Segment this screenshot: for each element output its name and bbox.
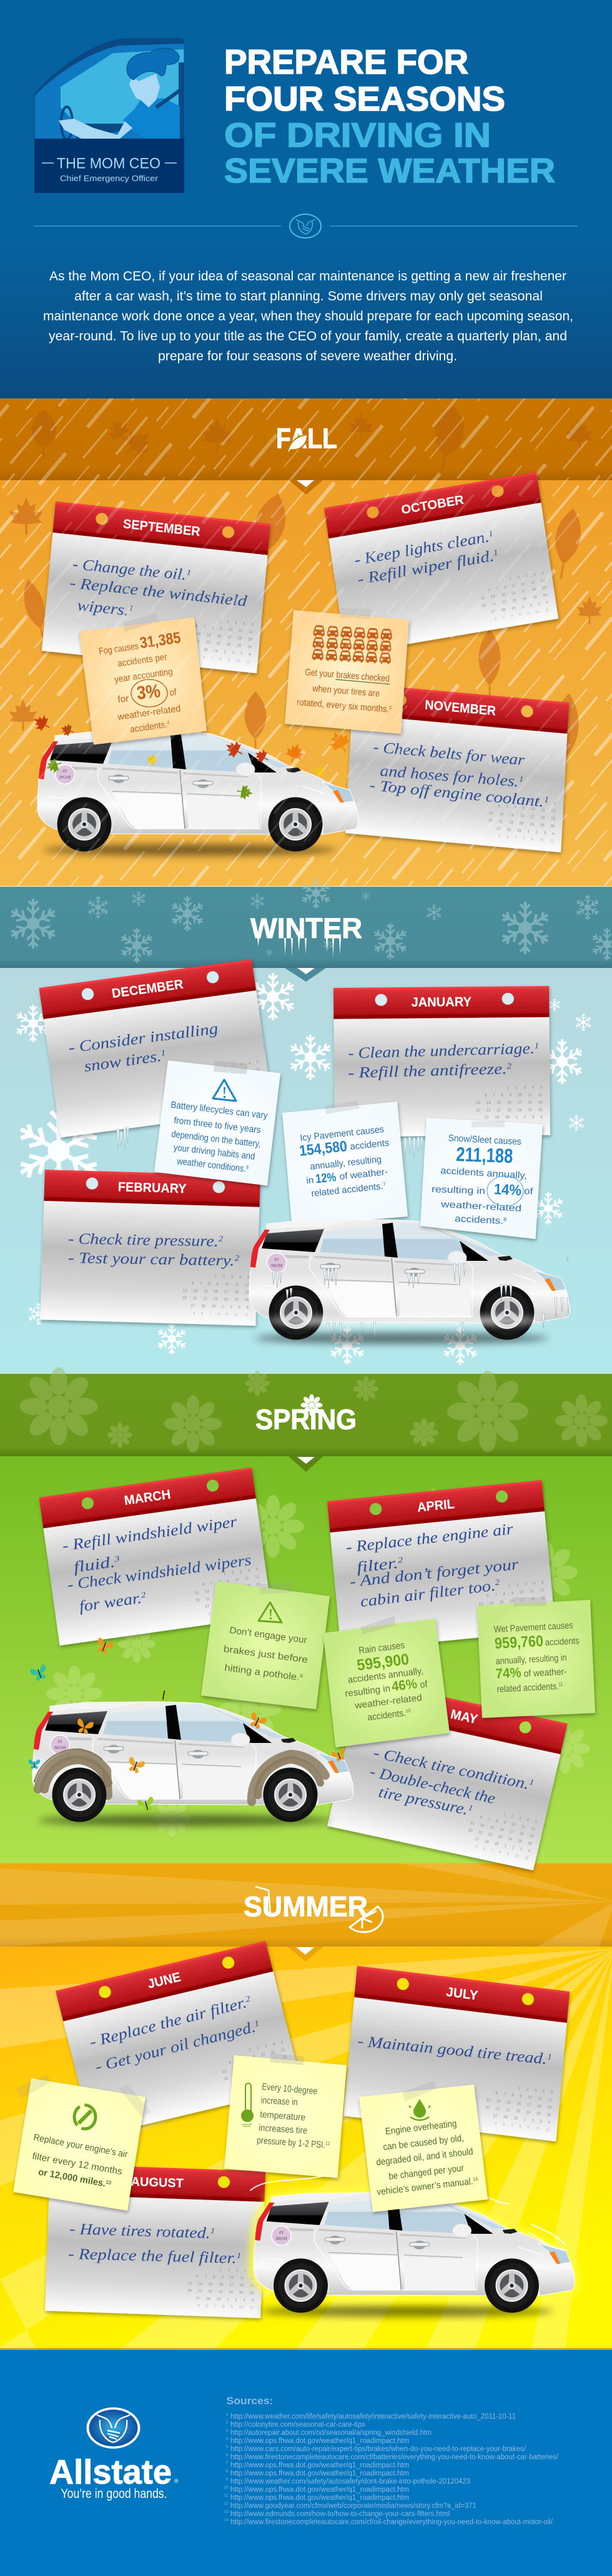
October tasks: 1 <box>493 548 499 558</box>
intro paragraph: As the Mom CEO, if your idea of seasonal car maintenance is getting a new air freshener <box>49 269 566 284</box>
sources: 10 <box>224 2486 229 2490</box>
May tasks: 1 <box>468 1802 474 1813</box>
March tasks: - Refill windshield wiper <box>61 1514 238 1555</box>
calendar: August: AUGUST <box>131 2174 184 2191</box>
panel: fall <box>0 398 612 886</box>
panel: summer <box>0 1863 612 2351</box>
December tasks: - Consider installing <box>67 1020 219 1057</box>
sticky note: battery: your driving habits and <box>173 1142 255 1162</box>
icon: warning triangle <box>259 1602 282 1622</box>
sources: http://www.cars.com/auto-repair/expert-tips/brakes/when-do-you-need-to-replace-your-brakes/ <box>230 2445 526 2453</box>
sticky note: snow and sleet: accidents. <box>455 1213 497 1226</box>
June tasks: 2 <box>244 1993 252 2004</box>
sources: http://www.ops.fhwa.dot.gov/weather/q1_roadimpact.htm <box>230 2470 409 2477</box>
icon: oil drop <box>409 2099 430 2120</box>
heat lines <box>250 2175 568 2250</box>
May tasks: - Check tire condition. <box>372 1744 513 1789</box>
sticky note: temperature <box>224 2053 347 2178</box>
calendar: October: OCTOBER <box>400 493 465 517</box>
heading: summer: SUMMER <box>244 1891 368 1922</box>
sticky note: brakes: 5 <box>389 705 392 711</box>
calendar: July <box>343 1966 570 2141</box>
icon: warning triangle <box>213 1080 236 1101</box>
sticky note: air filter: filter every 12 months <box>31 2151 123 2177</box>
sources: http://www.ops.fhwa.dot.gov/weather/q1_roadimpact.htm <box>230 2486 409 2494</box>
intro paragraph <box>43 269 573 363</box>
sticky note: brakes: when your tires are <box>312 683 380 699</box>
sticky note: brakes: rotated, every six months. <box>297 697 404 716</box>
sticky note: engine overheating: 14 <box>473 2176 478 2182</box>
January tasks: 2 <box>506 1061 512 1070</box>
sticky note: battery: Battery lifecycles can vary <box>170 1100 269 1121</box>
sticky note: wet pavement: 959,760 <box>494 1632 544 1652</box>
sticky note: snow and sleet: weather-related <box>440 1199 522 1214</box>
August tasks: - Have tires rotated. <box>69 2221 195 2241</box>
logo card: The Mom CEO <box>34 38 184 193</box>
logo: Allstate: You’re in good hands. <box>61 2487 167 2501</box>
sticky note: brakes: Get your brakes checked <box>305 667 390 684</box>
mud splatter <box>34 1749 325 1802</box>
intro paragraph: year-round. To live up to your title as the CEO of your family, create a quarterly plan, and <box>49 329 567 343</box>
March tasks: 2 <box>141 1590 147 1600</box>
calendar: June <box>56 1941 302 2137</box>
summer band <box>0 1863 612 1947</box>
logo: Allstate <box>49 2407 179 2501</box>
sticky note: snow and sleet: 14% <box>493 1181 522 1199</box>
July tasks: - Maintain good tire tread. <box>357 2033 525 2066</box>
title: OF DRIVING IN <box>224 116 491 154</box>
sticky note: icy pavement: 154,580 <box>299 1138 348 1160</box>
sources: http://www.firestonecompleteautocare.com/cf/oil-change/everything-you-need-to-know-about-motor-oil/ <box>230 2519 553 2526</box>
summer background <box>0 1947 612 2350</box>
frost and icicles <box>264 1257 570 1336</box>
February tasks: - Check tire pressure. <box>68 1231 202 1250</box>
fall background <box>0 480 612 886</box>
calendar: November <box>345 683 569 852</box>
sticky note: snow and sleet: 8 <box>503 1216 507 1222</box>
sticky note: air filter <box>13 2075 151 2211</box>
logo: Allstate: ® <box>174 2478 179 2484</box>
fall band <box>0 398 612 480</box>
September tasks <box>69 556 248 619</box>
December tasks: snow tires. <box>83 1049 152 1075</box>
sources: http://www.goodyear.com/cfmx/web/corporate/media/news/story.cfm?a_id=371 <box>230 2502 476 2510</box>
calendar: September: SEPTEMBER <box>122 517 201 539</box>
calendar: February <box>40 1170 260 1326</box>
sticky note: battery <box>154 1060 280 1185</box>
sticky note: battery: from three to five years <box>174 1115 262 1135</box>
sticky note: snow and sleet: resulting in <box>432 1184 485 1197</box>
May tasks: - Double-check the <box>368 1763 497 1807</box>
sticky note: engine overheating: degraded oil, and it should <box>376 2146 473 2168</box>
car: winter <box>249 1220 570 1344</box>
September tasks: - Replace the windshield <box>69 575 248 610</box>
sticky note: wet pavement: 11 <box>558 1681 563 1687</box>
sticky note: fog: weather-related <box>116 703 182 723</box>
sticky note: wet pavement: 74% <box>495 1664 521 1681</box>
sticky note: air filter: or 12,000 miles. <box>37 2167 108 2189</box>
sticky note: icy pavement: accidents <box>350 1137 390 1152</box>
calendar: January: JANUARY <box>411 995 471 1010</box>
sticky note: snow and sleet <box>420 1118 543 1239</box>
icon: wrench and arrows <box>74 2105 96 2129</box>
sticky note: wet pavement <box>477 1597 595 1718</box>
sticky note: air filter: Replace your engine’s air <box>32 2132 129 2160</box>
calendar: November: NOVEMBER <box>425 698 496 719</box>
sticky note: wet pavement: of weather- <box>523 1666 567 1679</box>
sources <box>224 2395 559 2526</box>
winter background <box>0 968 612 1373</box>
August tasks: 1 <box>237 2251 241 2260</box>
October tasks: - Refill wiper fluid. <box>356 551 476 588</box>
February tasks: 2 <box>234 1253 240 1263</box>
calendar: July: JULY <box>445 1985 478 2003</box>
sources: http://www.weather.com/safety/autosafety/dont-brake-into-pothole-20120423 <box>230 2478 470 2485</box>
calendar: February: FEBRUARY <box>118 1180 187 1196</box>
sticky note: icy pavement: 7 <box>383 1181 387 1187</box>
sticky note: fog: accidents. <box>129 719 172 735</box>
April tasks <box>345 1521 520 1611</box>
notch <box>289 480 323 495</box>
butterflies <box>29 1637 347 1814</box>
sticky note: rain: 595,900 <box>356 1651 410 1674</box>
May tasks: 1 <box>528 1777 535 1787</box>
title: PREPARE FOR <box>224 42 468 81</box>
sticky note: icy pavement: Icy Pavement causes <box>300 1124 385 1143</box>
background leaves <box>9 490 602 779</box>
June tasks <box>88 1993 262 2076</box>
calendar: January <box>333 986 550 1137</box>
sources: http://colonytire.com/seasonal-car-care-tips <box>230 2421 365 2429</box>
sticky note: icy pavement: 12% <box>315 1170 337 1186</box>
calendar: May <box>327 1679 568 1870</box>
sources: http://www.ops.fhwa.dot.gov/weather/q1_roadimpact.htm <box>230 2462 409 2469</box>
title: SEVERE WEATHER <box>224 151 555 190</box>
sources: 7 <box>226 2462 229 2465</box>
sticky note: rain: 46% <box>391 1675 418 1694</box>
January tasks: - Refill the antifreeze. <box>348 1061 483 1082</box>
April tasks: cabin air filter too. <box>359 1579 480 1611</box>
sources: http://www.ops.fhwa.dot.gov/weather/q1_roadimpact.htm <box>230 2437 409 2445</box>
April tasks: - And don’t forget your <box>348 1556 520 1591</box>
sun rays <box>0 1947 612 2351</box>
sticky note: fog: of <box>169 687 177 698</box>
January tasks: - Clean the undercarriage. <box>348 1041 515 1062</box>
heading: spring: SPRING <box>255 1404 357 1435</box>
sticky note: engine overheating <box>359 2081 488 2212</box>
sticky note: temperature: temperature <box>260 2110 306 2123</box>
February tasks: - Test your car battery. <box>68 1250 210 1269</box>
January tasks <box>348 1040 540 1082</box>
sources: 4 <box>226 2437 229 2441</box>
sticky note: pothole: 9 <box>299 1673 304 1679</box>
panel: spring <box>0 1368 612 1870</box>
sticky note: fog: for <box>117 693 129 705</box>
sticky note: wet pavement: Wet Pavement causes <box>493 1620 573 1635</box>
sticky note: icy pavement: of weather- <box>339 1167 388 1182</box>
sticky note: engine overheating: Engine overheating <box>385 2118 457 2137</box>
sticky note: icy pavement <box>282 1100 408 1226</box>
March tasks <box>61 1514 252 1616</box>
January tasks: 1 <box>535 1040 539 1050</box>
October tasks <box>353 528 500 588</box>
sticky note: engine overheating: can be caused by old, <box>383 2133 465 2153</box>
sticky note: fog <box>79 613 207 744</box>
emblem: good hands <box>86 2407 140 2449</box>
June tasks: - Get your oil changed. <box>94 2023 239 2076</box>
spring background <box>0 1456 612 1863</box>
sticky note: snow and sleet: 211,188 <box>456 1143 513 1167</box>
sticky note: snow and sleet: of <box>524 1186 534 1197</box>
sticky note: temperature: pressure by 1-2 PSI. <box>257 2135 342 2152</box>
background flowers <box>46 1489 590 1837</box>
intro paragraph: maintenance work done once a year, when they should prepare for each upcoming season, <box>43 309 573 323</box>
sticky note: snow and sleet: Snow/Sleet causes <box>448 1133 521 1147</box>
panel: winter <box>0 877 612 1373</box>
sources: http://www.weather.com/life/safety/autosafety/interactive/safety-interactive-auto_2011-10-11 <box>230 2413 516 2421</box>
background snowflakes <box>14 973 592 1364</box>
sources: http://www.edmunds.com/how-to/how-to-change-your-cars-filters.html <box>230 2510 450 2518</box>
December tasks <box>67 1020 219 1075</box>
sources: http://www.firestonecompleteautocare.com/cf/batteries/everything-you-need-to-know-about-car-batteries/ <box>230 2454 559 2461</box>
August tasks <box>68 2221 241 2267</box>
logo: Allstate: Allstate <box>49 2452 172 2491</box>
icon: thermometer <box>241 2083 254 2126</box>
June tasks: 1 <box>254 2018 260 2028</box>
May tasks: tire pressure. <box>377 1784 460 1817</box>
March tasks: fluid. <box>72 1555 107 1576</box>
rain overlay <box>0 480 612 886</box>
icon: good hands emblem <box>290 214 321 238</box>
April tasks: - Replace the engine air <box>345 1521 514 1556</box>
sources: 6 <box>226 2454 229 2457</box>
spring band <box>0 1368 612 1456</box>
calendar: April <box>327 1480 555 1651</box>
logo card: The Mom CEO: THE MOM CEO <box>57 155 160 172</box>
calendar: May: MAY <box>449 1707 479 1727</box>
July tasks: 1 <box>547 2051 552 2061</box>
sources: 2 <box>226 2421 229 2425</box>
December tasks: 1 <box>160 1048 166 1058</box>
calendar: September <box>42 501 270 673</box>
icon: citrus slice <box>350 1907 383 1932</box>
November tasks: - Top off engine coolant. <box>368 777 522 808</box>
sources: 13 <box>224 2510 229 2514</box>
April tasks: filter. <box>356 1556 390 1576</box>
sources: Sources: <box>226 2395 274 2407</box>
sticky note: pothole <box>201 1581 330 1709</box>
sticky note: battery: weather conditions. <box>177 1156 258 1176</box>
sources: 3 <box>226 2429 229 2433</box>
sources: 14 <box>224 2519 229 2522</box>
sticky note: rain <box>323 1616 450 1747</box>
sticky note: icy pavement: related accidents. <box>311 1181 385 1199</box>
sticky note: temperature: 12 <box>325 2141 330 2146</box>
sticky note: rain: 10 <box>405 1707 412 1714</box>
April tasks: 2 <box>397 1555 404 1565</box>
calendar: December: DECEMBER <box>111 977 184 1001</box>
notch <box>287 1947 323 1962</box>
November tasks: and hoses for holes. <box>380 762 505 789</box>
sticky note: wet pavement: accidents <box>545 1636 580 1648</box>
November tasks: 1 <box>518 774 524 784</box>
September tasks: wipers. <box>76 597 124 619</box>
sticky note: rain: Rain causes <box>358 1640 405 1656</box>
June tasks: - Replace the air filter. <box>88 2000 229 2051</box>
sources: 8 <box>226 2470 229 2474</box>
September tasks: 1 <box>186 568 192 577</box>
title <box>224 42 555 190</box>
car: spring <box>32 1702 353 1826</box>
intro paragraph: after a car wash, it’s time to start planning. Some drivers may only get seasonal <box>74 289 543 303</box>
sticky note: temperature: Every 10-degree <box>262 2081 318 2097</box>
sticky note: pothole: hitting a pothole. <box>224 1662 294 1682</box>
sticky note: rain: weather-related <box>353 1692 423 1711</box>
logo card: The Mom CEO: Chief Emergency Officer <box>60 174 159 183</box>
September tasks: 1 <box>129 603 134 613</box>
sticky note: battery: 6 <box>246 1165 249 1170</box>
calendar: October <box>324 472 558 654</box>
October tasks: 1 <box>488 528 494 538</box>
sources: 12 <box>224 2502 229 2506</box>
sticky note: fog: Fog causes <box>98 641 139 657</box>
sticky note: engine overheating: be changed per your <box>388 2163 465 2182</box>
panel: footer <box>0 2348 612 2576</box>
notch <box>285 968 326 982</box>
sticky note: fog: 3% <box>136 681 162 704</box>
icicles under calendars <box>117 1127 423 1159</box>
March tasks: - Check windshield wipers <box>66 1552 252 1594</box>
sources: http://www.ops.fhwa.dot.gov/weather/q1_roadimpact.htm <box>230 2494 409 2502</box>
calendar: June: JUNE <box>146 1970 182 1991</box>
sticky note: fog: year accounting <box>114 666 174 685</box>
icon: flower <box>301 1394 322 1416</box>
February tasks <box>68 1231 240 1270</box>
winter band <box>0 877 612 968</box>
intro paragraph: prepare for four seasons of severe weather driving. <box>158 349 457 363</box>
sticky note: temperature: increases tire <box>259 2123 308 2136</box>
calendar: March: MARCH <box>123 1488 172 1508</box>
November tasks <box>368 739 550 811</box>
sticky note: wet pavement: related accidents. <box>496 1680 571 1695</box>
sources: 11 <box>224 2494 229 2498</box>
car: fall <box>37 731 358 856</box>
calendar: December <box>39 959 273 1138</box>
falling leaves <box>31 712 355 801</box>
sticky note: engine overheating: vehicle’s owner’s manual. <box>377 2175 483 2198</box>
calendar: April: APRIL <box>417 1497 455 1515</box>
notch <box>289 1456 323 1472</box>
calendar: March <box>39 1468 272 1646</box>
page header panel <box>0 0 612 398</box>
sticky note: fog: 31,385 <box>139 629 182 652</box>
heading: winter: WINTER <box>250 912 362 944</box>
sticky note: fog: accidents per <box>117 651 168 669</box>
sticky note: icy pavement: in <box>306 1175 314 1186</box>
November tasks: - Check belts for wear <box>372 739 525 769</box>
sticky note: brakes <box>285 608 409 734</box>
sticky note: rain: accidents. <box>367 1707 410 1723</box>
sources: http://autorepair.about.com/od/seasonal/a/spring_windshield.htm <box>230 2429 432 2437</box>
heading: summer <box>244 1887 383 1932</box>
August tasks: - Replace the fuel filter. <box>68 2246 214 2266</box>
sticky note: temperature: increase in <box>260 2095 298 2108</box>
sticky note: battery: depending on the battery, <box>171 1129 262 1150</box>
sticky note: rain: accidents annually, <box>347 1666 424 1685</box>
sources: 9 <box>226 2478 229 2482</box>
sources: 5 <box>226 2445 229 2449</box>
October tasks: - Keep lights clean. <box>353 531 475 569</box>
sticky note: snow and sleet: accidents annually, <box>440 1165 528 1181</box>
sticky note: pothole: brakes just before <box>223 1644 308 1666</box>
May tasks <box>368 1744 535 1819</box>
sticky note: air filter: 13 <box>106 2179 112 2186</box>
sticky note: fog: 4 <box>167 719 170 726</box>
title: FOUR SEASONS <box>224 79 505 118</box>
February tasks: 2 <box>219 1234 224 1243</box>
icon: rows of cars <box>312 625 392 664</box>
March tasks: for wear. <box>78 1591 136 1616</box>
March tasks: 3 <box>113 1554 121 1564</box>
November tasks: 1 <box>544 794 550 804</box>
calendar: August <box>45 2164 265 2318</box>
sources: 1 <box>226 2413 229 2417</box>
sticky note: icy pavement: annually, resulting <box>310 1154 382 1172</box>
September tasks: - Change the oil. <box>72 556 178 583</box>
car: summer <box>250 2175 575 2317</box>
sticky note: pothole: Don’t engage your <box>229 1625 308 1646</box>
August tasks: 1 <box>210 2226 215 2235</box>
sticky note: rain: of <box>419 1679 428 1690</box>
sticky note: rain: resulting in <box>344 1683 391 1699</box>
heading: fall: FALL <box>276 422 337 455</box>
sticky note: wet pavement: annually, resulting in <box>495 1652 567 1667</box>
April tasks: 2 <box>495 1577 500 1587</box>
